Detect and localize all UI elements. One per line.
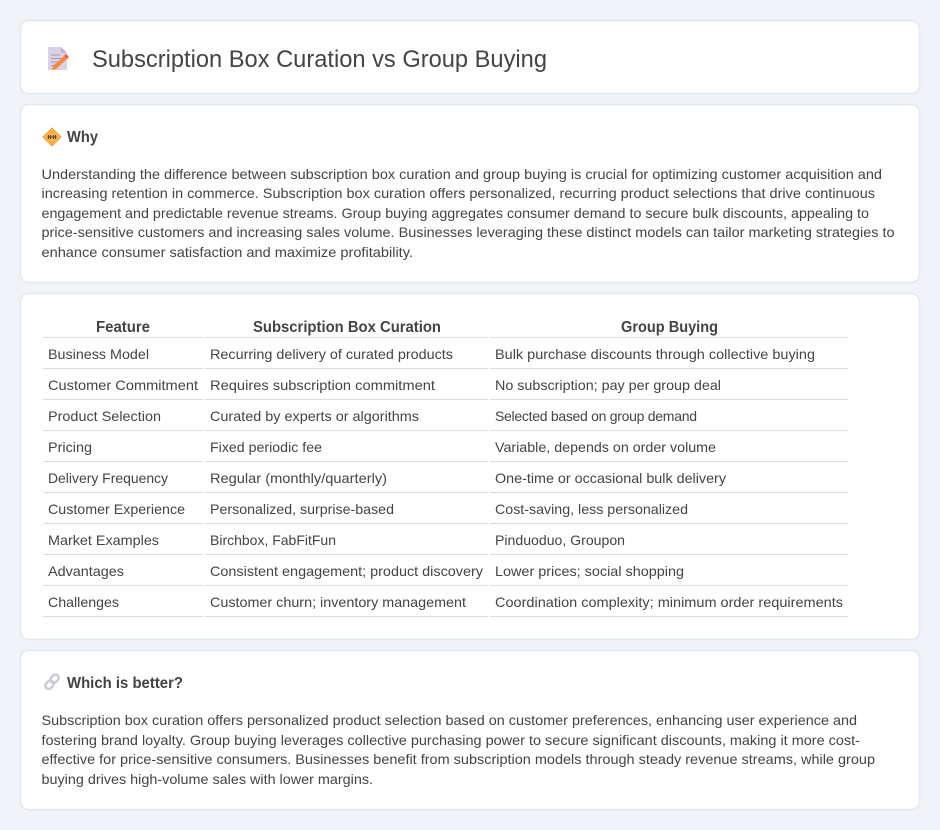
row: delivery frequency: Regular (monthly/quarterly) (210, 470, 387, 486)
row: advantages: Consistent engagement; product discovery (210, 563, 483, 579)
row: market examples (48, 532, 625, 548)
text block: verdict paragraph: fostering brand loyalty. Group buying leverages collective purchasing power to secure significant discounts, making it more cost- (42, 732, 860, 748)
row: delivery frequency: Delivery Frequency (48, 470, 168, 486)
icon: chain link (44, 673, 60, 690)
row: market examples: Market Examples (48, 532, 159, 548)
row: product selection (48, 408, 697, 424)
row: product selection: Selected based on group demand (495, 408, 697, 424)
text block: verdict paragraph: buying drives high-volume sales with lower margins. (42, 771, 373, 787)
table header row: Feature (96, 319, 150, 336)
row: advantages: Lower prices; social shopping (495, 563, 684, 579)
row: delivery frequency (48, 470, 726, 486)
table header row: Subscription Box Curation (253, 319, 441, 336)
text block: why paragraph: price-sensitive customers and increasing sales volume. Businesses leveraging these distinct models can tailor marketing strategies to (42, 224, 895, 240)
row: customer experience: Customer Experience (48, 501, 185, 517)
icon: document with pencil (48, 47, 69, 70)
row: delivery frequency: One-time or occasional bulk delivery (495, 470, 726, 486)
panel: comparison table (20, 294, 920, 640)
row: customer experience (48, 501, 688, 517)
text block: why paragraph: increasing retention in commerce. Subscription box curation offers personalized, recurring product selections that drive continuous (42, 185, 875, 201)
row: customer experience: Personalized, surprise-based (210, 501, 394, 517)
panel: why (20, 104, 920, 282)
row: business model (48, 346, 815, 362)
panel: which is better (20, 650, 920, 810)
row: customer commitment: Customer Commitment (48, 377, 198, 393)
row: challenges: Coordination complexity; minimum order requirements (495, 594, 843, 610)
row: advantages: Advantages (48, 563, 124, 579)
text block: why paragraph: Understanding the difference between subscription box curation and group buying is crucial for optimizing customer acquisition and (42, 166, 882, 182)
row: pricing: Fixed periodic fee (210, 439, 322, 455)
title: Subscription Box Curation vs Group Buying (92, 46, 547, 73)
row: pricing: Variable, depends on order volume (495, 439, 716, 455)
row: challenges (48, 594, 843, 610)
row: advantages (48, 563, 684, 579)
row: business model: Bulk purchase discounts through collective buying (495, 346, 815, 362)
heading: why: Why (67, 129, 98, 146)
row: challenges: Customer churn; inventory management (210, 594, 466, 610)
panel: header (20, 20, 920, 94)
row: market examples: Pinduoduo, Groupon (495, 532, 625, 548)
row: customer commitment: No subscription; pay per group deal (495, 377, 721, 393)
text block: why paragraph: engagement and predictable revenue streams. Group buying aggregates consumer demand to secure bulk discounts, appealing to (42, 205, 869, 221)
row: business model: Business Model (48, 346, 149, 362)
text block: why paragraph: enhance consumer satisfaction and maximize profitability. (42, 244, 413, 260)
table header row: Group Buying (621, 319, 718, 336)
row: pricing (48, 439, 716, 455)
row: customer commitment (48, 377, 721, 393)
row: product selection: Product Selection (48, 408, 161, 424)
row: market examples: Birchbox, FabFitFun (210, 532, 336, 548)
row: challenges: Challenges (48, 594, 119, 610)
row: pricing: Pricing (48, 439, 92, 455)
text block: verdict paragraph (42, 712, 875, 787)
text block: why paragraph (42, 166, 895, 260)
text block: verdict paragraph: effective for price-sensitive consumers. Businesses benefit from subscription models through steady revenue streams, while group (42, 751, 875, 767)
row: business model: Recurring delivery of curated products (210, 346, 453, 362)
row: customer experience: Cost-saving, less personalized (495, 501, 688, 517)
row: product selection: Curated by experts or algorithms (210, 408, 419, 424)
icon: warning diamond (43, 128, 61, 146)
row: customer commitment: Requires subscription commitment (210, 377, 435, 393)
text block: verdict paragraph: Subscription box curation offers personalized product selection based on customer preferences, enhancing user experience and (42, 712, 857, 728)
table header row (96, 319, 718, 336)
heading: which is better: Which is better? (67, 675, 183, 692)
